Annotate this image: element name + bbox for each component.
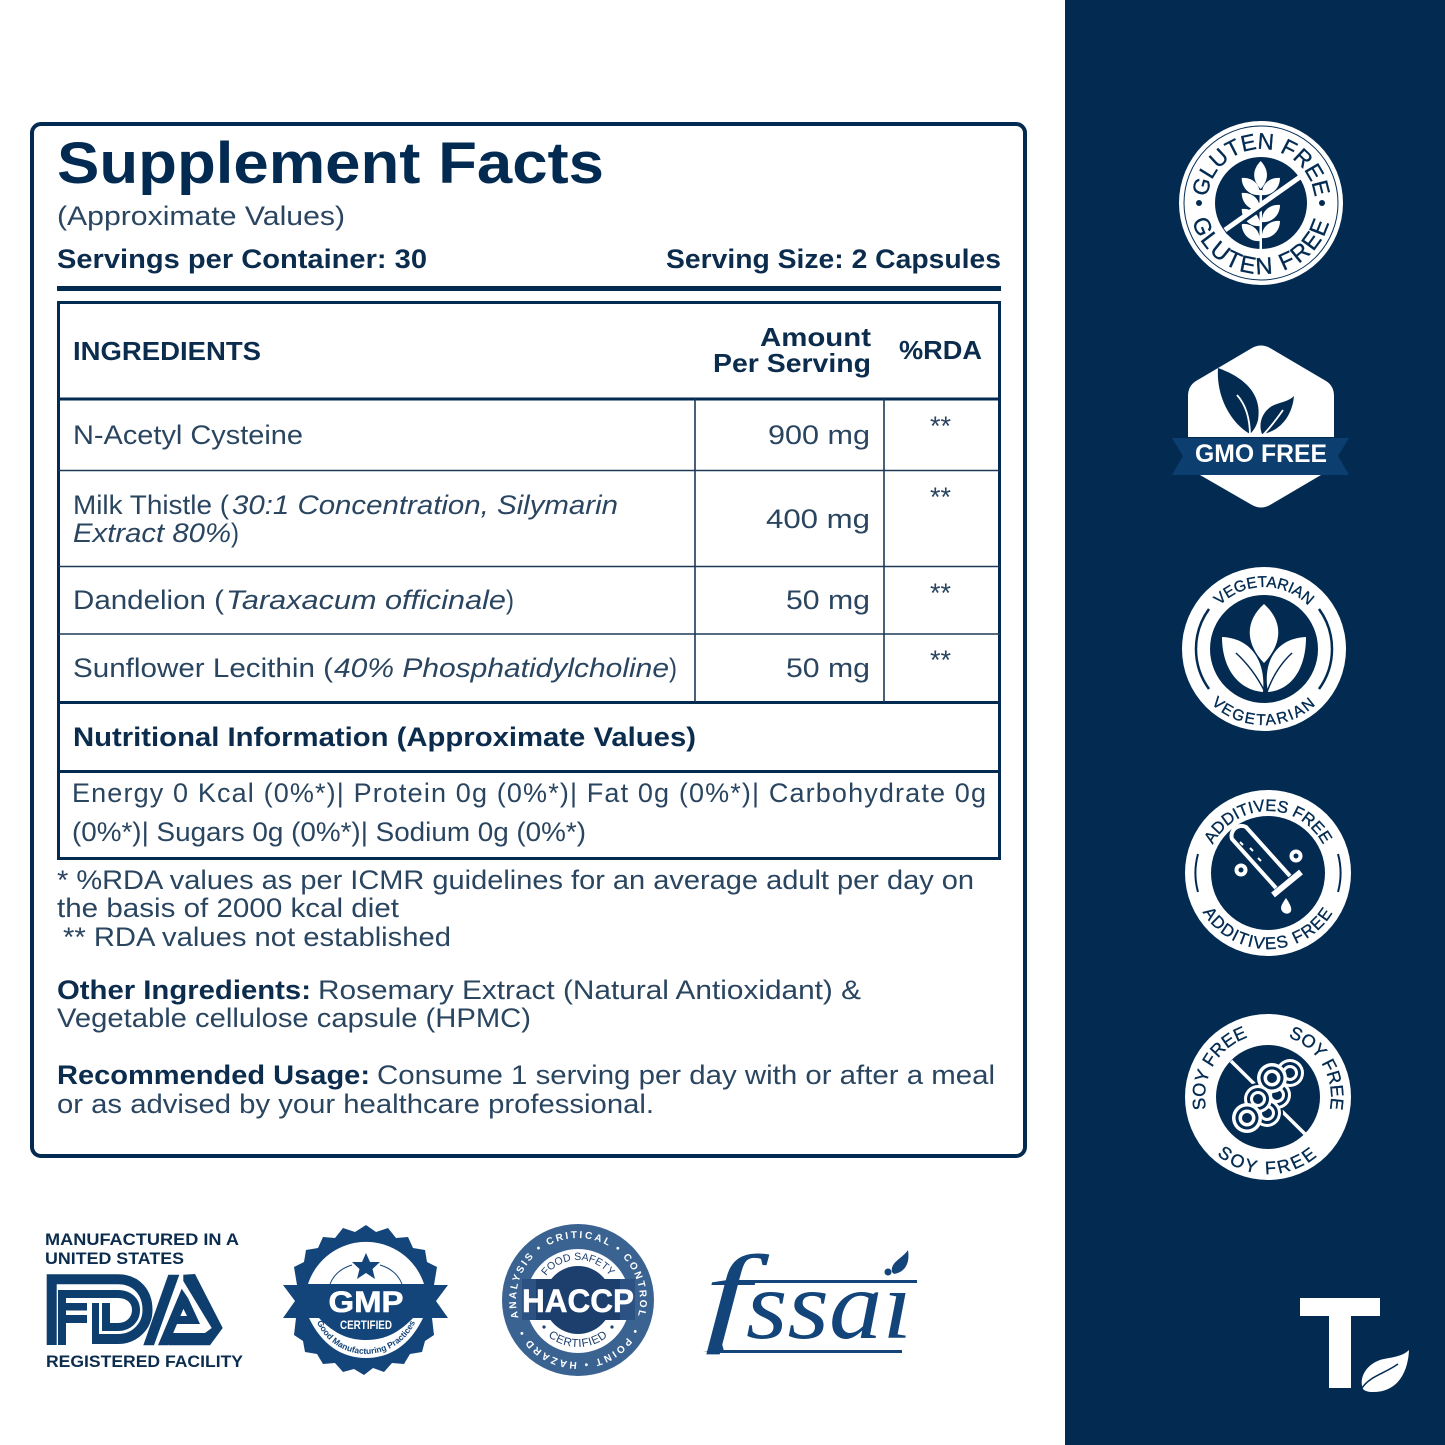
row: Milk Thistle: 400 mg — [766, 504, 870, 534]
row: Sunflower Lecithin: Sunflower Lecithin ( — [73, 653, 333, 683]
row: N-Acetyl Cysteine — [73, 411, 951, 450]
icon: test tube — [1232, 826, 1301, 914]
nutritional values: Energy 0 Kcal (0%*)| Protein 0g (0%*)| Fat 0g (0%*)| Carbohydrate 0g — [72, 778, 986, 808]
other ingredients — [57, 975, 861, 1033]
table: ingredients — [58, 302, 1000, 858]
logo: HACCP: • POINT • HAZARD • — [520, 1330, 637, 1369]
table header — [73, 322, 982, 378]
logo: fssai — [703, 1234, 917, 1360]
footnotes — [57, 865, 974, 952]
badge: additives free: ADDITIVES FREE — [1205, 799, 1333, 845]
badge: vegetarian: VEGETARIAN — [1212, 576, 1315, 605]
icon: leaves — [1218, 368, 1294, 436]
logo: GMP certified: Good Manufacturing Practices — [318, 1320, 415, 1354]
row: Dandelion: Taraxacum officinale — [226, 585, 506, 615]
row: Milk Thistle — [73, 482, 951, 548]
other ingredients: Rosemary Extract (Natural Antioxidant) & — [318, 975, 861, 1005]
nutritional information heading: Nutritional Information (Approximate Values) — [73, 722, 696, 752]
row: N-Acetyl Cysteine: 900 mg — [768, 420, 870, 450]
logo: HACCP: FOOD SAFETY — [541, 1252, 616, 1276]
badge: GMO free — [1172, 346, 1349, 508]
row: Sunflower Lecithin: 40% Phosphatidylcholine — [334, 653, 669, 683]
logo: FDA registered facility: REGISTERED FACILITY — [46, 1352, 244, 1371]
row: Dandelion: Dandelion ( — [73, 585, 224, 615]
badge: vegetarian: VEGETARIAN — [1214, 695, 1315, 726]
table header: Per Serving — [713, 348, 871, 378]
other ingredients: Other Ingredients: — [57, 975, 311, 1005]
recommended usage: Recommended Usage: — [57, 1060, 370, 1090]
logo: HACCP: CERTIFIED — [550, 1332, 606, 1347]
row: Dandelion: 50 mg — [786, 585, 870, 615]
recommended usage — [57, 1060, 995, 1119]
table header: INGREDIENTS — [73, 336, 261, 366]
other ingredients: Vegetable cellulose capsule (HPMC) — [57, 1003, 531, 1033]
row: Sunflower Lecithin: ) — [669, 653, 677, 683]
serving size: Serving Size: 2 Capsules — [666, 244, 1001, 274]
nutritional values — [72, 778, 986, 847]
logo: FDA registered facility — [45, 1230, 244, 1371]
row: N-Acetyl Cysteine: N-Acetyl Cysteine — [73, 420, 303, 450]
servings per container: Servings per Container: 30 — [57, 244, 427, 274]
badge: soy free — [1185, 1014, 1351, 1180]
row: Milk Thistle: 30:1 Concentration, Silymarin — [232, 490, 618, 520]
icon: soybean pod — [1230, 1057, 1306, 1135]
subtitle: (Approximate Values) — [57, 201, 345, 231]
row: Dandelion: ) — [506, 585, 514, 615]
table header: Amount — [760, 322, 871, 352]
row: Dandelion — [73, 578, 951, 615]
footnotes: the basis of 2000 kcal diet — [57, 893, 400, 923]
badge: soy free: SOY FREE — [1218, 1146, 1317, 1174]
badge: soy free: SOY FREE — [1290, 1027, 1344, 1110]
logo: FDA registered facility: UNITED STATES — [45, 1249, 184, 1268]
icon: wheat — [1242, 161, 1280, 252]
recommended usage: or as advised by your healthcare professional. — [57, 1089, 654, 1119]
logo: HACCP: HACCP — [522, 1283, 634, 1319]
table header: %RDA — [899, 335, 982, 365]
badge: GMO free: GMO FREE — [1195, 440, 1327, 468]
title: Supplement Facts — [57, 131, 604, 196]
row: Dandelion: ** — [930, 578, 951, 608]
row: Milk Thistle: Milk Thistle ( — [73, 490, 229, 520]
logo: FDA registered facility: MANUFACTURED IN A — [45, 1230, 239, 1249]
logo: HACCP: ANALYSIS • CRITICAL • CONTROL — [509, 1231, 647, 1318]
row: Milk Thistle: ** — [930, 482, 951, 512]
footnotes: * %RDA values as per ICMR guidelines for an average adult per day on — [57, 865, 974, 895]
logo: GMP certified: CERTIFIED — [340, 1318, 392, 1332]
row: N-Acetyl Cysteine: ** — [930, 411, 951, 441]
right navy panel — [1065, 0, 1445, 1445]
row: Milk Thistle: Extract 80% — [73, 518, 231, 548]
logo: fssai: f — [704, 1234, 770, 1355]
logo: GMP certified — [283, 1225, 448, 1375]
logo: fssai: ssai — [746, 1252, 912, 1360]
heading rule — [57, 286, 1001, 291]
badge: gluten free: GLUTEN FREE — [1193, 133, 1330, 196]
badge: vegetarian — [1182, 567, 1346, 731]
badge: additives free — [1185, 790, 1351, 956]
row: Milk Thistle: ) — [231, 518, 239, 548]
badge: additives free: ADDITIVES FREE — [1202, 906, 1332, 950]
brand logo: T with leaf — [1300, 1298, 1409, 1392]
row: Sunflower Lecithin: 50 mg — [786, 653, 870, 683]
nutritional values: (0%*)| Sugars 0g (0%*)| Sodium 0g (0%*) — [72, 817, 586, 847]
row: Sunflower Lecithin — [73, 645, 951, 683]
row: Sunflower Lecithin: ** — [930, 645, 951, 675]
icon: three leaves — [1222, 604, 1306, 692]
logo: HACCP — [502, 1224, 654, 1376]
recommended usage: Consume 1 serving per day with or after a meal — [377, 1060, 995, 1090]
logo: GMP certified: GMP — [328, 1286, 404, 1319]
badge: soy free: SOY FREE — [1192, 1026, 1248, 1110]
badge: gluten free: GLUTEN FREE — [1194, 218, 1330, 275]
badge: gluten free — [1179, 121, 1343, 285]
footnotes: ** RDA values not established — [63, 922, 451, 952]
